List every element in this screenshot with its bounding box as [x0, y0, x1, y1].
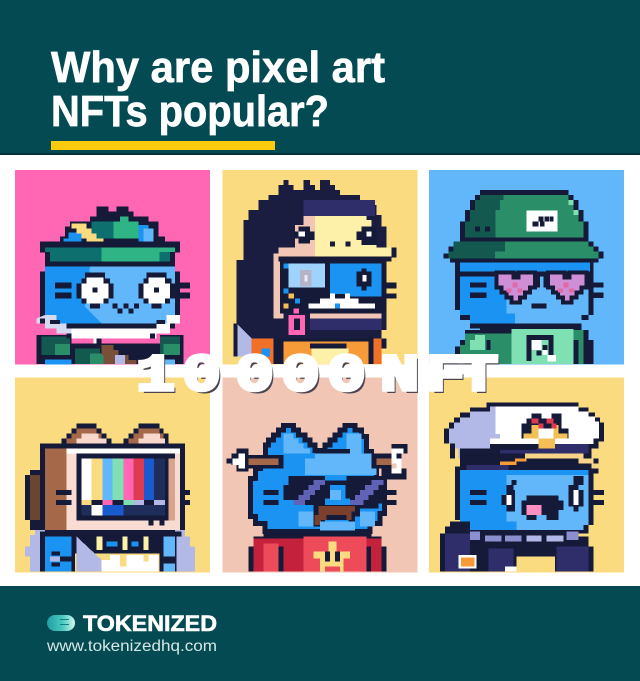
panel: NFT cat with TV head on yellow: [15, 377, 210, 572]
header band: [0, 0, 640, 155]
panel: NFT cat with feather hat on pink: [15, 170, 210, 364]
icon: sleeve badge: [458, 555, 477, 568]
icon: left eye: [77, 273, 113, 308]
overlay text: 10 000 NFT: 10 000 NFT: [136, 347, 505, 406]
icon: hat patch: [527, 211, 558, 232]
icon: shirt logo: [527, 335, 556, 362]
coat: [25, 530, 45, 572]
title underline: [51, 141, 275, 150]
icon: right heart lens: [548, 273, 586, 302]
icon: TV ears: [62, 423, 168, 444]
icon: left heart lens: [497, 273, 535, 302]
panel: NFT cat with captain hat on yellow: [429, 377, 624, 572]
icon: right eye: [568, 476, 583, 512]
panel: NFT cat with bucket hat and heart glasses on blue: [429, 170, 624, 364]
TV colour bars: [77, 454, 168, 521]
arrow through head: [227, 444, 408, 479]
brand name: TOKENIZED: [83, 611, 217, 636]
title: Why are pixel art: [51, 43, 385, 92]
title: NFTs popular?: [51, 87, 329, 136]
title: [51, 43, 385, 136]
icon: left eye: [502, 480, 517, 512]
panel: NFT cat with sunglasses and arrow on peach: [222, 377, 417, 572]
icon: Tokenized logo pill: [47, 615, 75, 631]
icon: open mouth: [522, 496, 563, 520]
panel: NFT cat with hood and monocle on yellow: [222, 170, 417, 364]
footer band: [0, 586, 640, 681]
icon: star on shirt: [313, 542, 350, 572]
website URL: www.tokenizedhq.com: [46, 638, 217, 655]
icon: right eye: [138, 273, 175, 308]
TV body: [40, 443, 185, 533]
icon: sunglasses: [283, 476, 387, 508]
icon: pink tongue: [288, 308, 305, 335]
icon: hood eyes: [293, 227, 377, 245]
icon: captain emblem: [522, 413, 568, 448]
